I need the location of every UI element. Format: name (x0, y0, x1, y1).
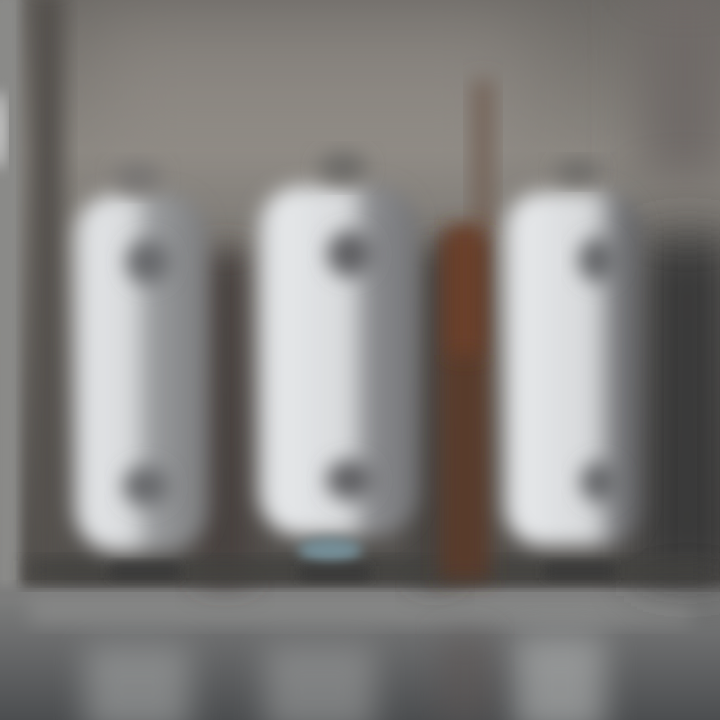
heater 2 (258, 153, 418, 562)
heater feet (110, 564, 615, 580)
heater 3 (504, 161, 642, 546)
heater 2 valves (326, 231, 374, 500)
floor (0, 586, 720, 720)
heater 1 (74, 164, 208, 552)
heater 3 top cap (556, 161, 600, 183)
heater 1 valves (123, 240, 170, 506)
heater 3 valves (578, 238, 620, 502)
heater 1 top cap (114, 164, 162, 192)
heater 2 top cap (319, 153, 367, 183)
heater 2 blue base (298, 538, 362, 562)
shadows behind heaters (30, 235, 720, 580)
copper pipe (440, 80, 494, 580)
